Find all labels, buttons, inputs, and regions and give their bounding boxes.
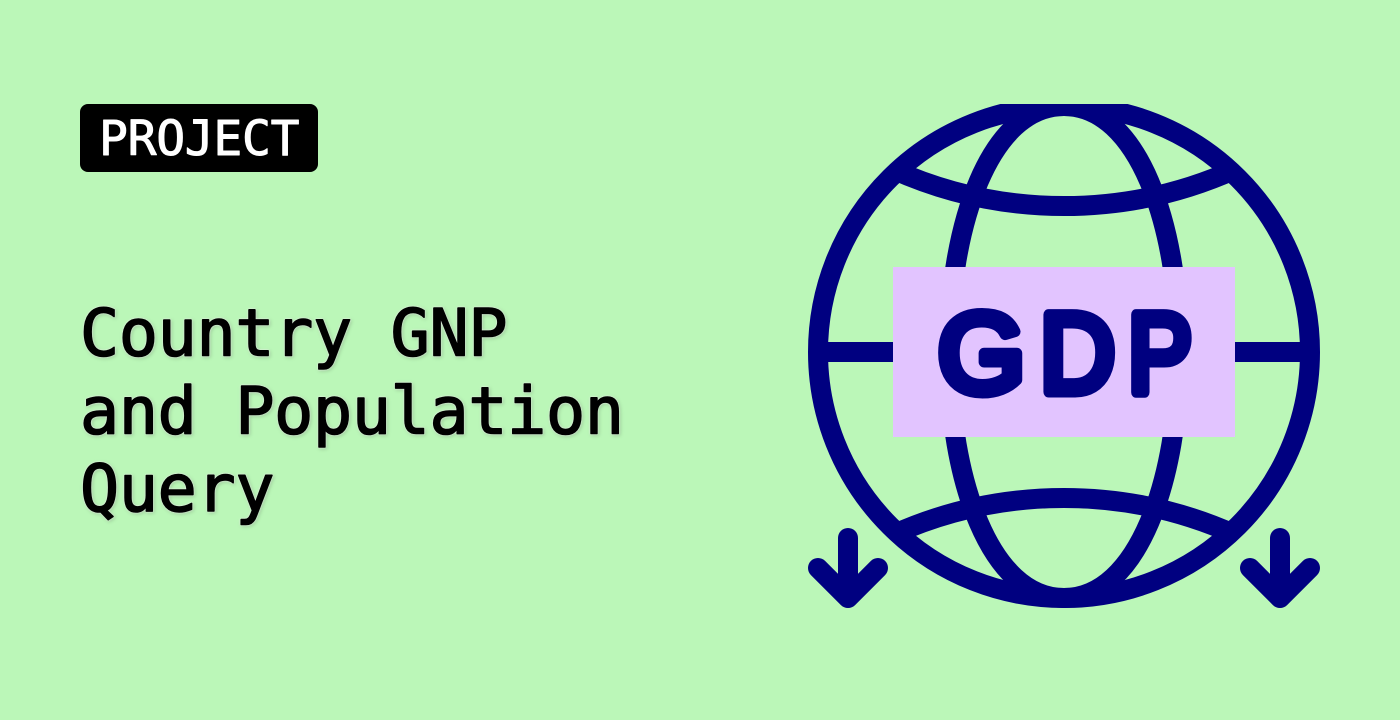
title (80, 296, 624, 527)
GDP label panel (893, 267, 1235, 437)
globe outline (818, 106, 1310, 598)
globe upper latitude (892, 169, 1236, 206)
GDP label text: G (938, 291, 1025, 416)
arrow: left down (818, 538, 878, 598)
title: and Population (80, 374, 624, 450)
GDP label text: D (1040, 291, 1115, 416)
title: Query (80, 452, 274, 527)
title: Country GNP (80, 296, 507, 372)
badge: PROJECT: PROJECT (99, 111, 299, 167)
globe equator (818, 342, 1310, 362)
icon: GDP globe (818, 106, 1310, 598)
GDP label text (938, 291, 1192, 416)
globe lower latitude (892, 498, 1236, 535)
badge: PROJECT (80, 104, 318, 172)
arrow: right down (1250, 538, 1310, 598)
GDP label text: P (1128, 291, 1192, 416)
globe meridian (949, 106, 1179, 598)
